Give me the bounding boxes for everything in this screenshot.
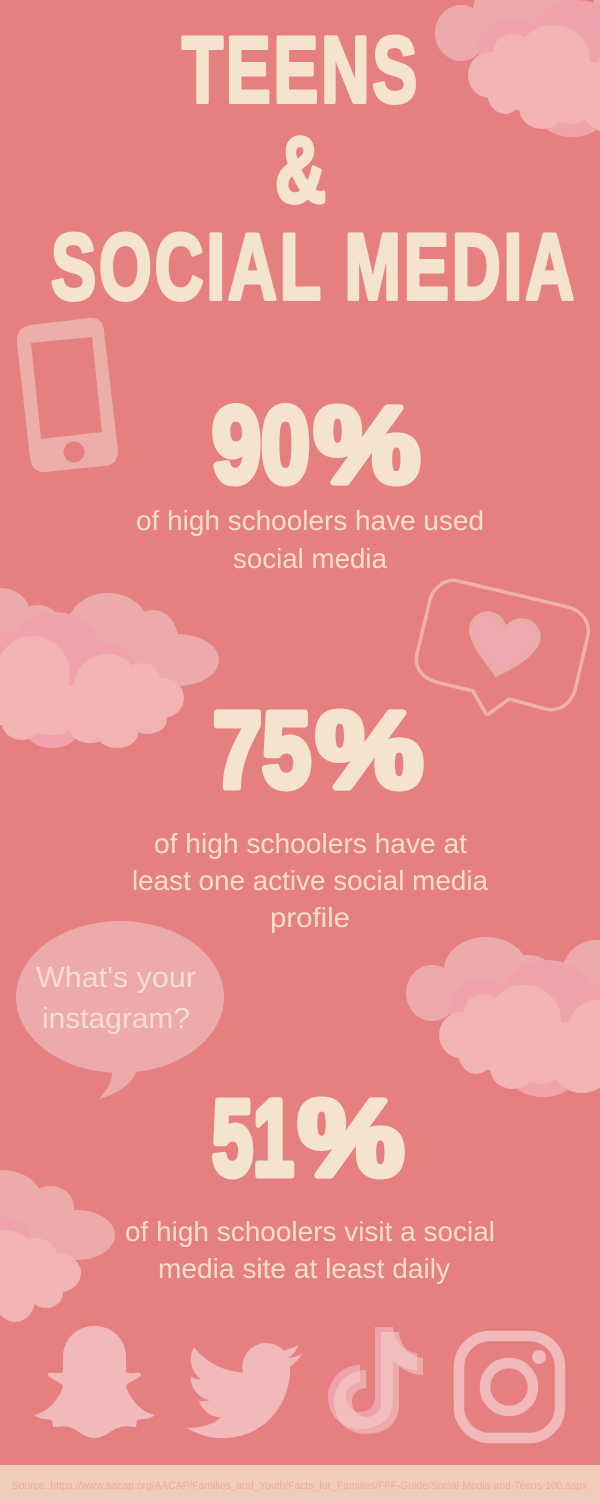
stat: 75%: % [316, 689, 423, 810]
icon: phone [17, 318, 118, 472]
text: 51% description: media site at least daily [158, 1253, 450, 1284]
title: & [275, 117, 326, 222]
title [51, 17, 577, 319]
speech bubble: what's your instagram: What's your [36, 962, 196, 994]
speech bubble: what's your instagram: instagram? [42, 1003, 190, 1035]
stat: 51% [212, 1077, 404, 1198]
icon: snapchat [34, 1326, 154, 1438]
source bar [0, 1465, 600, 1501]
cloud: top right [435, 0, 600, 137]
icon: twitter [186, 1343, 302, 1438]
stat: 51%: 51 [212, 1077, 294, 1198]
text: 75% description: profile [270, 902, 350, 933]
text: 90% description: social media [233, 543, 387, 574]
text: 51% description: of high schoolers visit a social [125, 1216, 495, 1247]
text: 75% description: least one active social media [132, 865, 488, 896]
icon: like speech bubble with heart [416, 580, 588, 714]
title: TEENS [182, 17, 420, 122]
icon: instagram [459, 1336, 560, 1438]
text: 75% description [132, 828, 488, 933]
stat: 90%: 90 [212, 384, 310, 505]
stat: 75%: 75 [213, 689, 311, 810]
speech bubble: what's your instagram [16, 921, 224, 1099]
cloud: middle right [406, 937, 600, 1097]
stat: 90%: % [314, 384, 420, 505]
stat: 75% [213, 689, 423, 810]
cloud: middle left [0, 588, 219, 748]
text: 90% description: of high schoolers have used [136, 505, 484, 536]
stat: 90% [212, 384, 420, 505]
text: 90% description [136, 505, 484, 574]
icon: tiktok [328, 1327, 423, 1434]
stat: 51%: % [298, 1077, 404, 1198]
cloud: lower left [0, 1170, 115, 1322]
text: 51% description [125, 1216, 495, 1284]
text: 75% description: of high schoolers have at [154, 828, 467, 859]
